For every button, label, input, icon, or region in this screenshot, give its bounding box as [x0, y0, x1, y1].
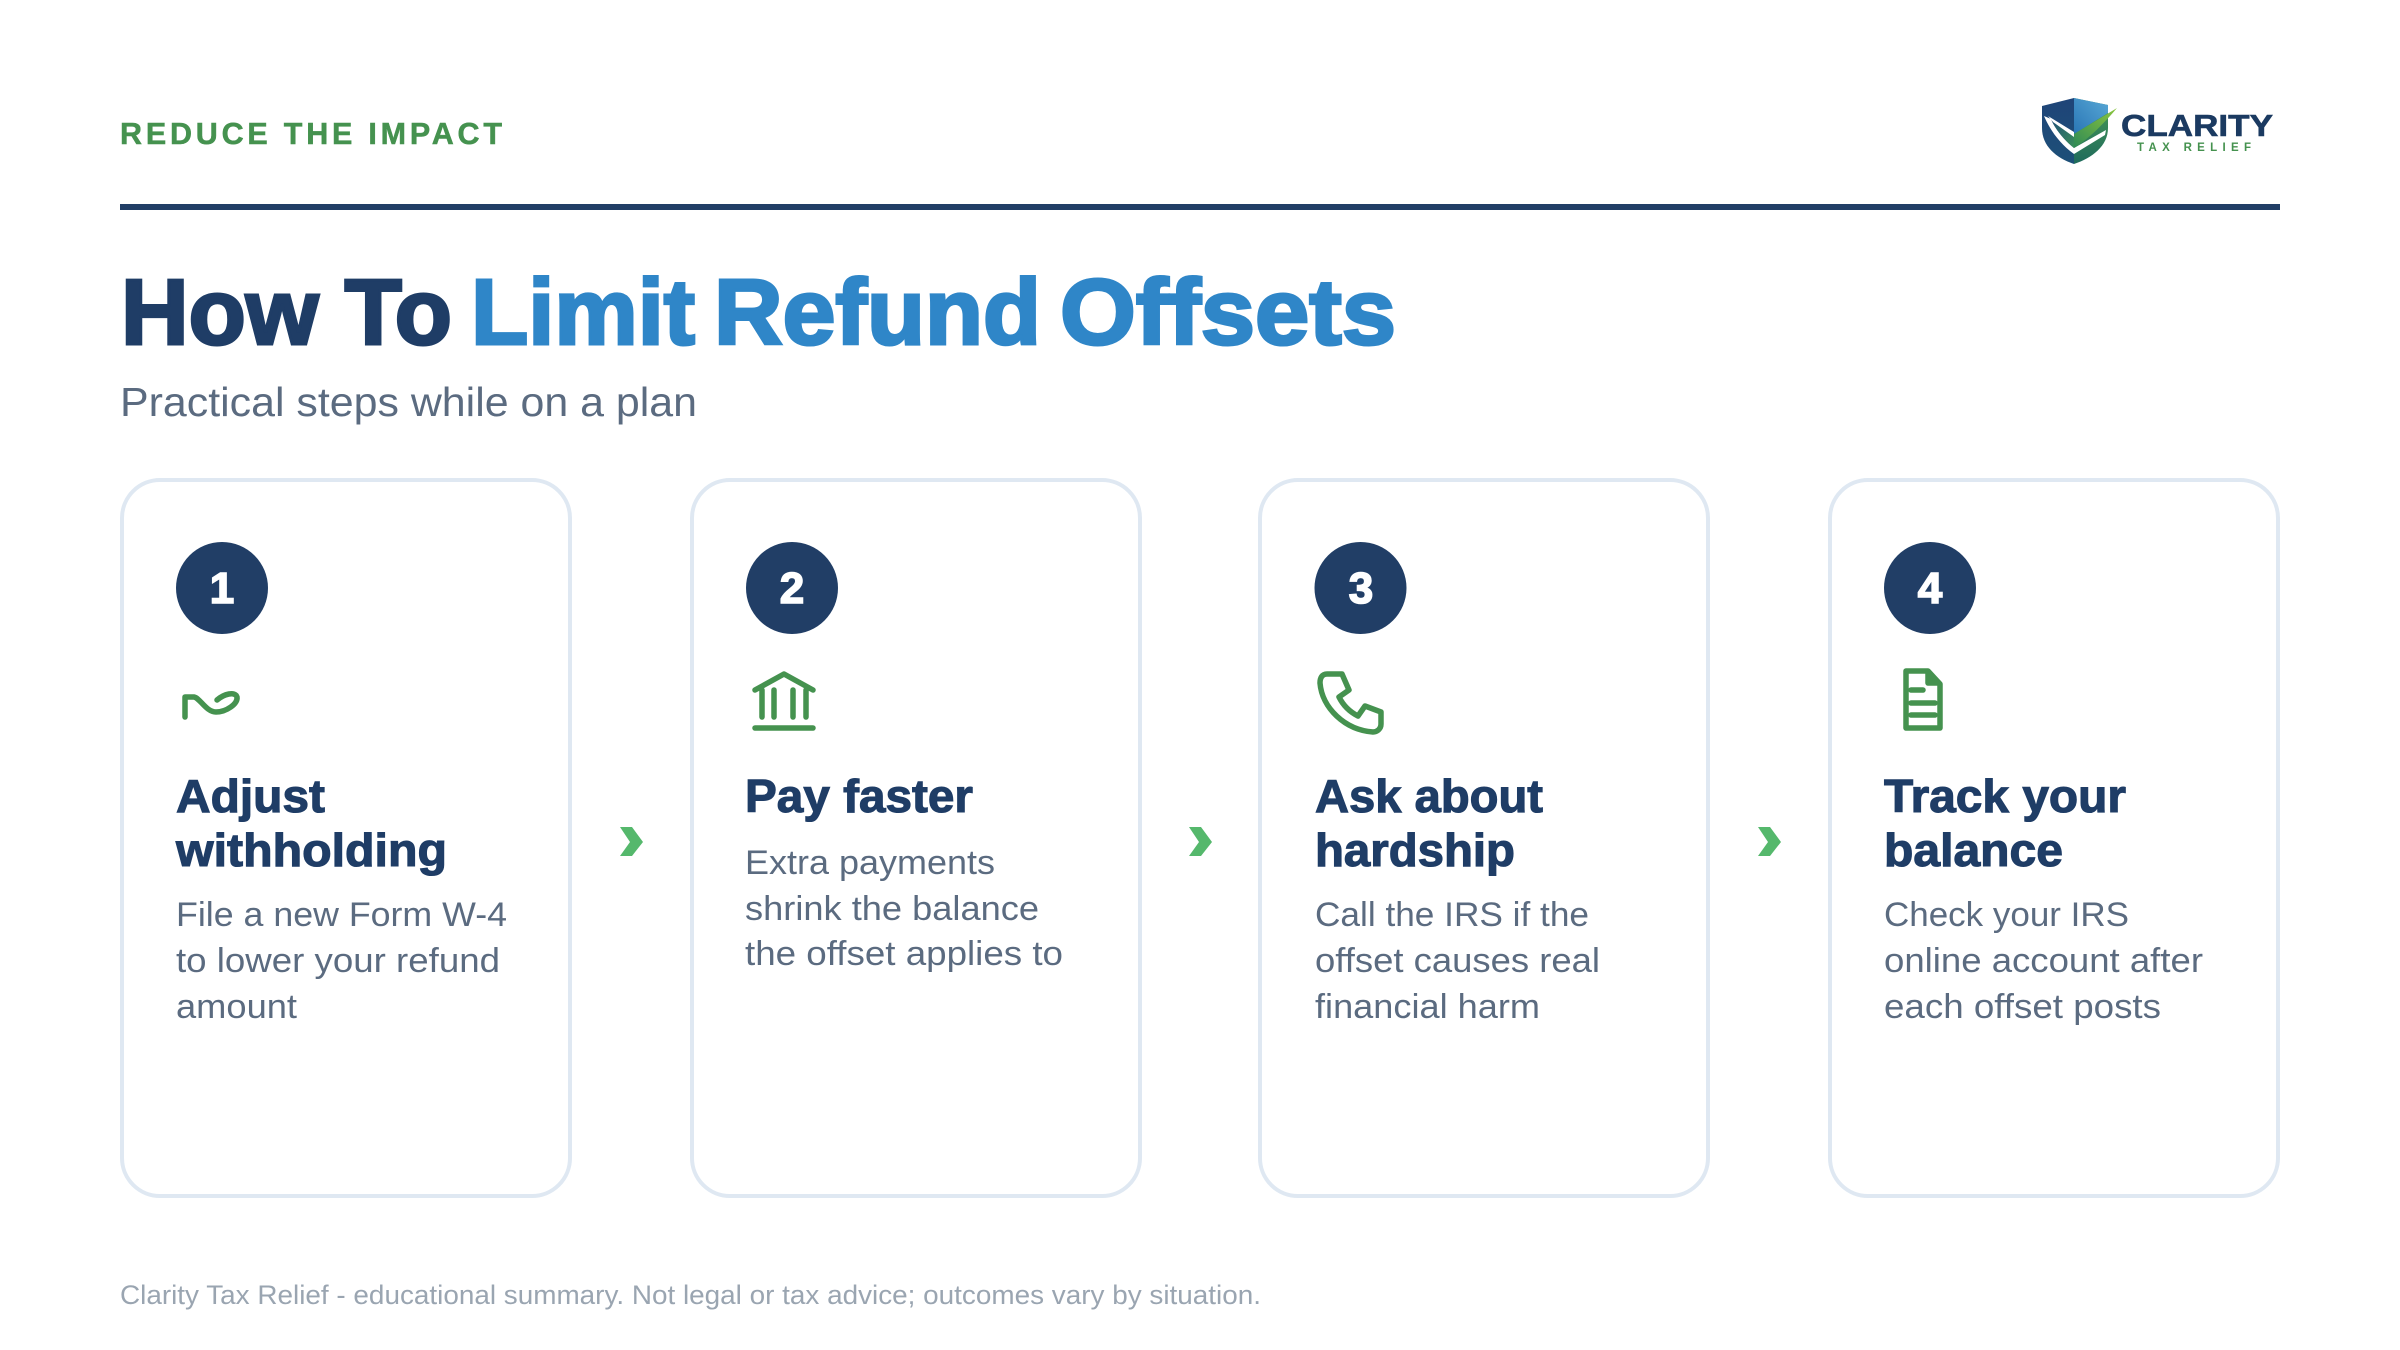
card 4 description — [1884, 896, 2203, 1026]
eyebrow label: REDUCE THE IMPACT — [120, 117, 502, 151]
number badge 3 — [1314, 542, 1406, 634]
card 2 description: the offset applies to — [745, 935, 1063, 973]
number badge 3: 3 — [1349, 564, 1373, 613]
card 3 heading: hardship — [1315, 824, 1515, 876]
card 3 heading — [1315, 770, 1543, 876]
card 1 description: File a new Form W-4 — [176, 896, 507, 934]
number badge 4: 4 — [1918, 564, 1943, 613]
card 1 heading: withholding — [175, 824, 447, 876]
card 1 description — [176, 896, 507, 1026]
logo: Clarity Tax Relief: CLARITY — [2121, 108, 2273, 143]
card 3 description: Call the IRS if the — [1315, 896, 1589, 934]
subtitle: Practical steps while on a plan — [120, 379, 697, 425]
title: Refund — [714, 260, 1041, 364]
title: Offsets — [1060, 260, 1396, 364]
step card 2 — [692, 480, 1140, 1196]
icon: phone — [1320, 674, 1381, 732]
icon: bank — [755, 674, 813, 728]
footer disclaimer: Clarity Tax Relief - educational summary. Not legal or tax advice; outcomes vary by situation. — [120, 1280, 1261, 1310]
title: How To — [121, 260, 452, 364]
step card 3 — [1260, 480, 1708, 1196]
number badge 2 — [746, 542, 838, 634]
card 3 description: financial harm — [1315, 988, 1540, 1026]
logo: Clarity Tax Relief — [2042, 98, 2273, 164]
card 1 description: to lower your refund — [176, 942, 500, 980]
card 4 description: online account after — [1884, 942, 2203, 980]
card 1 heading: Adjust — [176, 770, 325, 822]
arrow 2 — [1189, 827, 1212, 856]
card 4 heading: balance — [1884, 824, 2063, 876]
card 4 description: each offset posts — [1884, 988, 2161, 1026]
step card 4 — [1830, 480, 2278, 1196]
number badge 2: 2 — [780, 564, 804, 613]
logo: Clarity Tax Relief: TAX RELIEF — [2137, 142, 2251, 154]
arrow 1 — [620, 827, 643, 856]
card 2 description: shrink the balance — [745, 890, 1039, 928]
title: Limit — [471, 260, 695, 364]
arrow 3 — [1758, 827, 1781, 856]
card 4 description: Check your IRS — [1884, 896, 2129, 934]
number badge 1 — [176, 542, 268, 634]
card 1 heading — [175, 770, 447, 876]
step card 1 — [122, 480, 570, 1196]
icon: document — [1906, 671, 1940, 728]
card 3 description: offset causes real — [1315, 942, 1600, 980]
card 2 description — [745, 844, 1063, 973]
card 1 description: amount — [176, 988, 297, 1026]
icon: wave — [185, 694, 237, 717]
card 4 heading: Track your — [1884, 770, 2126, 822]
card 4 heading — [1884, 770, 2126, 876]
card 3 description — [1315, 896, 1600, 1026]
number badge 1: 1 — [210, 564, 234, 613]
card 2 heading: Pay faster — [745, 770, 973, 822]
number badge 4 — [1884, 542, 1976, 634]
card 2 description: Extra payments — [745, 844, 995, 882]
card 3 heading: Ask about — [1315, 770, 1543, 822]
